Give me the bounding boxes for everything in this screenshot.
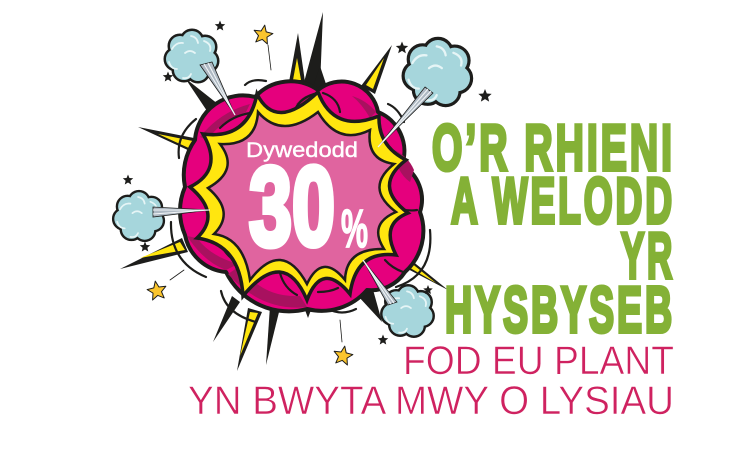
pink subheading [188,339,674,423]
burst: magenta lobes [180,81,423,311]
big figure: 30%: 30 [249,144,335,269]
air jets from the clouds [153,62,433,305]
pink subheading: FOD EU PLANT [403,339,674,383]
small dark stars [123,20,492,344]
gold stars [146,24,354,366]
burst: yellow star frame [190,92,408,300]
central pink panel [208,112,396,284]
motion arcs around the burst [170,45,430,342]
lobe crease lines [220,93,417,295]
cloud: bottom right [383,286,432,336]
cloud: top left [166,31,217,81]
pink subheading: YN BWYTA MWY O LYSIAU [188,379,674,423]
big figure: 30%: % [341,199,368,259]
cloud: left [114,192,163,240]
cloud: top right [405,40,470,104]
spikes behind the burst [120,12,448,371]
green heading [432,111,675,346]
label: Dywedodd: Dywedodd [246,139,358,162]
green heading: YR [621,219,675,292]
lobe shading [187,94,414,308]
